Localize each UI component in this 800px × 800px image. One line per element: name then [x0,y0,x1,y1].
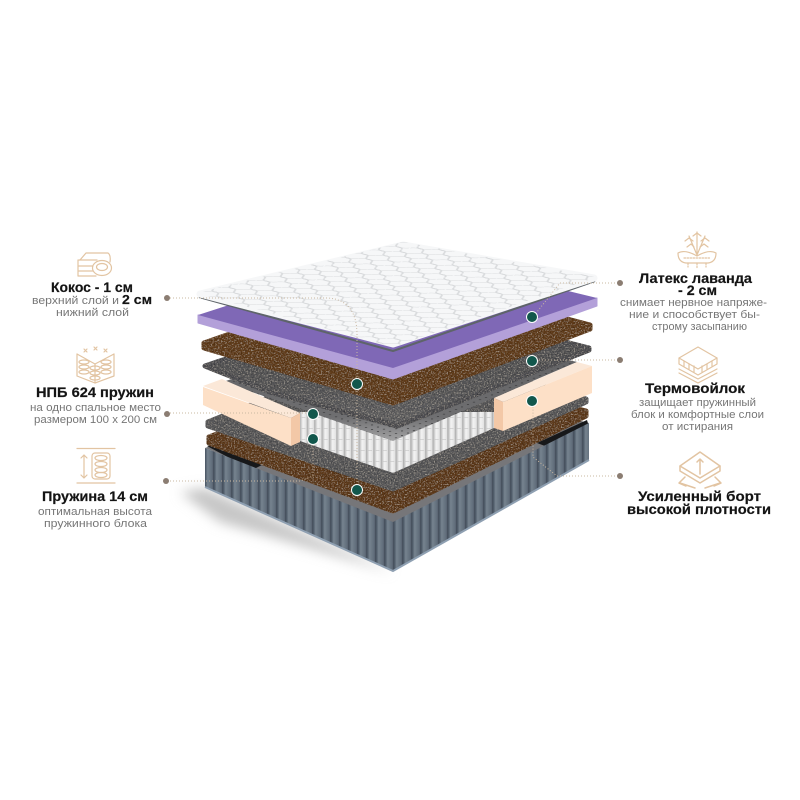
heading: Кокос - 1 см [51,279,133,295]
leader end dots [163,280,623,484]
description: на одно спальное место [30,402,161,414]
callout: lavender latex [620,232,767,333]
callout: reinforced border [627,452,771,517]
mattress cross-section illustration [180,242,597,575]
reinforced border: ribbed side walls [205,420,589,575]
callout: spring height [38,448,153,530]
description: 2 см [122,292,152,307]
heading [639,270,752,298]
reinforced border: top surface [205,375,589,523]
description [32,292,152,319]
heading: НПБ 624 пружин [36,384,154,400]
description: оптимальная высота [38,506,153,518]
heading: высокой плотности [627,501,771,517]
upper coconut layer [204,275,590,403]
description [38,506,153,530]
pocket spring block [300,412,494,473]
icon: spring height [77,448,115,483]
description: размером 100 х 200 см [34,414,157,426]
icon: felt layers [679,347,717,383]
icon: reinforced edge [679,452,721,488]
description: снимает нервное напряже- [620,297,767,309]
description [30,402,161,426]
description: верхний слой и [32,295,119,307]
icon: coconut slab [78,253,112,276]
lavender latex layer [198,250,597,379]
quilted top cover [197,242,597,351]
description: блок и комфортные слои [631,409,764,421]
heading: - 2 см [678,282,717,298]
description [631,397,764,433]
description: от истирания [662,421,733,433]
description [620,297,767,333]
callout: thermofelt [631,347,764,433]
heading: Латекс лаванда [639,270,752,286]
description: нижний слой [56,307,129,319]
reinforced border: black inner corners [207,420,589,470]
lower coconut layer [209,365,586,511]
lower thermo felt layer [208,345,586,489]
callout: springs count [30,347,161,426]
icon: lavender sprig [678,232,716,268]
description: ние и способствует бы- [629,309,760,321]
floor shadow [180,488,393,572]
callout: coconut [32,253,152,319]
description: защищает пружинный [639,397,756,409]
upper thermo felt layer [205,300,589,426]
perforated spring cover sheet [223,320,577,441]
description: строму засыпанию [652,321,747,333]
heading: Усиленный борт [638,488,761,504]
green layer markers [308,312,538,496]
leader lines [170,283,618,490]
heading: Термовойлок [645,380,746,396]
heading: Пружина 14 см [42,488,148,504]
left foam block [203,379,300,446]
right foam block [494,362,592,431]
heading [627,488,771,517]
icon: spring block [77,347,114,383]
description: пружинного блока [44,518,148,530]
